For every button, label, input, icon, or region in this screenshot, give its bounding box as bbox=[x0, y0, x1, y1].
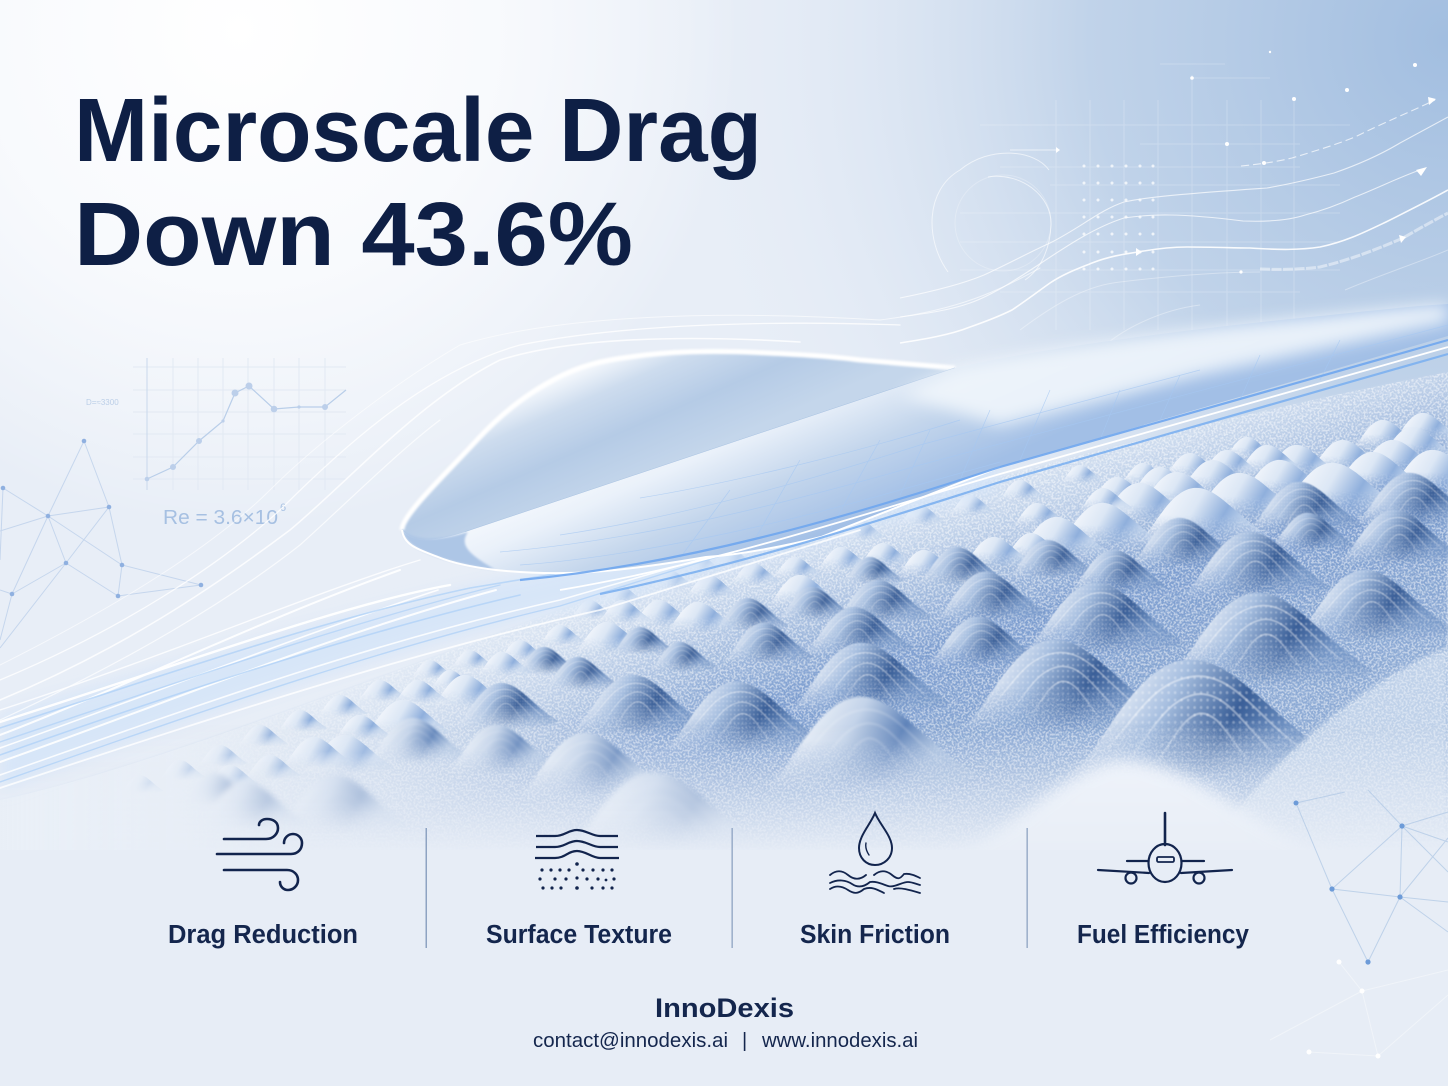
icon: layered lines over particles bbox=[535, 830, 619, 890]
title: Microscale Drag bbox=[74, 81, 762, 181]
footer brand name: InnoDexis bbox=[655, 993, 794, 1023]
title bbox=[74, 81, 762, 285]
line chart with faint grid: D=≈3300 bbox=[86, 398, 119, 407]
divider bbox=[732, 828, 733, 948]
feature: surface texture: Surface Texture bbox=[486, 921, 672, 949]
airfoil: main body with mesh bbox=[402, 304, 1448, 594]
title: Down 43.6% bbox=[74, 185, 633, 285]
feature: fuel efficiency: Fuel Efficiency bbox=[1077, 921, 1250, 949]
airflow streamlines bbox=[0, 268, 1040, 790]
icon: wind lines bbox=[217, 819, 302, 890]
divider bbox=[426, 828, 427, 948]
feature: skin friction bbox=[800, 813, 950, 949]
footer contact line: | bbox=[742, 1030, 747, 1052]
icon: front-view airplane bbox=[1098, 813, 1232, 884]
textured wave surface bbox=[142, 372, 1448, 845]
icon: drop over waves bbox=[830, 813, 920, 893]
feature: fuel efficiency bbox=[1077, 813, 1250, 949]
feature: drag reduction: Drag Reduction bbox=[168, 921, 358, 949]
lower panel wash bbox=[0, 850, 1448, 1086]
front pale hump bbox=[900, 759, 1360, 880]
Reynolds number label: Re = 3.6×10 bbox=[163, 507, 278, 529]
footer contact line bbox=[533, 1030, 918, 1052]
left edge fade over surface bbox=[139, 730, 272, 796]
feature: surface texture bbox=[486, 830, 672, 949]
decoration: network graph left bbox=[0, 439, 203, 648]
airfoil: upper fin bbox=[402, 352, 955, 543]
footer contact line: contact@innodexis.ai bbox=[533, 1030, 728, 1052]
feature: drag reduction bbox=[168, 819, 358, 949]
divider bbox=[1026, 828, 1028, 948]
bottom fade over surface bbox=[0, 725, 1448, 855]
feature: skin friction: Skin Friction bbox=[800, 921, 950, 949]
decoration: network graph bottom-right bbox=[1270, 790, 1448, 1058]
decoration: top-right data overlay bbox=[900, 51, 1448, 350]
line chart with faint grid bbox=[86, 358, 346, 490]
Reynolds number label: 6 bbox=[280, 502, 286, 514]
footer contact line: www.innodexis.ai bbox=[761, 1030, 918, 1052]
